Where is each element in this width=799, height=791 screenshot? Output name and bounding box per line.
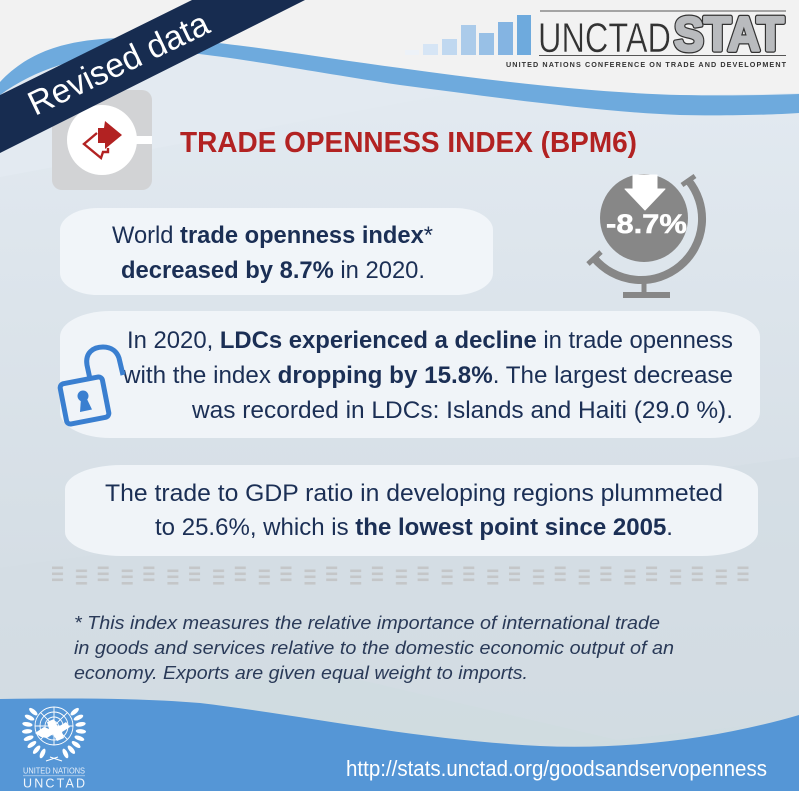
- icon: open padlock: [59, 347, 123, 425]
- organisation name: [23, 766, 85, 790]
- panel: LDCs: was recorded in LDCs: Islands and Haiti (29.0 %).: [191, 397, 733, 424]
- icon: globe with decline: [588, 174, 702, 298]
- logo wordmark: STAT: [674, 8, 784, 62]
- organisation name: UNCTAD: [23, 776, 85, 790]
- organisation name: UNITED NATIONS: [23, 766, 85, 776]
- panel: LDCs: [60, 311, 760, 438]
- logo wordmark: STAT: [674, 8, 784, 62]
- panel: developing regions: to 25.6%, which is the lowest point since 2005.: [155, 514, 673, 541]
- logo tagline: UNITED NATIONS CONFERENCE ON TRADE AND DEVELOPMENT: [506, 60, 787, 69]
- panel: world index: decreased by 8.7% in 2020.: [121, 257, 425, 284]
- logo: UNCTADstat: [405, 8, 787, 69]
- icon: trade arrows on grey tile: [52, 90, 152, 190]
- footnote: [74, 612, 674, 683]
- source link: http://stats.unctad.org/goodsandservopenness: [346, 756, 767, 781]
- footer wave: [0, 698, 799, 791]
- logo bar chart: [405, 15, 531, 55]
- icon: globe with decline: -8.7%: [606, 209, 687, 239]
- footnote: economy. Exports are given equal weight to imports.: [74, 662, 528, 683]
- logo wordmark: UNCTAD: [538, 14, 671, 61]
- footnote: in goods and services relative to the domestic economic output of an: [74, 637, 674, 658]
- panel: world index: [60, 208, 493, 295]
- logo wordmark: [538, 8, 784, 62]
- panel: world index: World trade openness index*: [112, 222, 433, 249]
- footnote: * This index measures the relative importance of international trade: [74, 612, 660, 633]
- title: TRADE OPENNESS INDEX (BPM6): [180, 127, 637, 159]
- blue header wave band: [0, 38, 799, 115]
- icon: United Nations emblem: [22, 707, 86, 761]
- banner: revised data: [0, 0, 305, 153]
- panel: developing regions: [65, 465, 758, 556]
- panel: LDCs: In 2020, LDCs experienced a decline in trade openness: [127, 327, 733, 354]
- panel: LDCs: with the index dropping by 15.8%. The largest decrease: [122, 362, 733, 389]
- banner: revised data: Revised data: [22, 5, 215, 123]
- panel: developing regions: The trade to GDP ratio in developing regions plummeted: [105, 480, 723, 507]
